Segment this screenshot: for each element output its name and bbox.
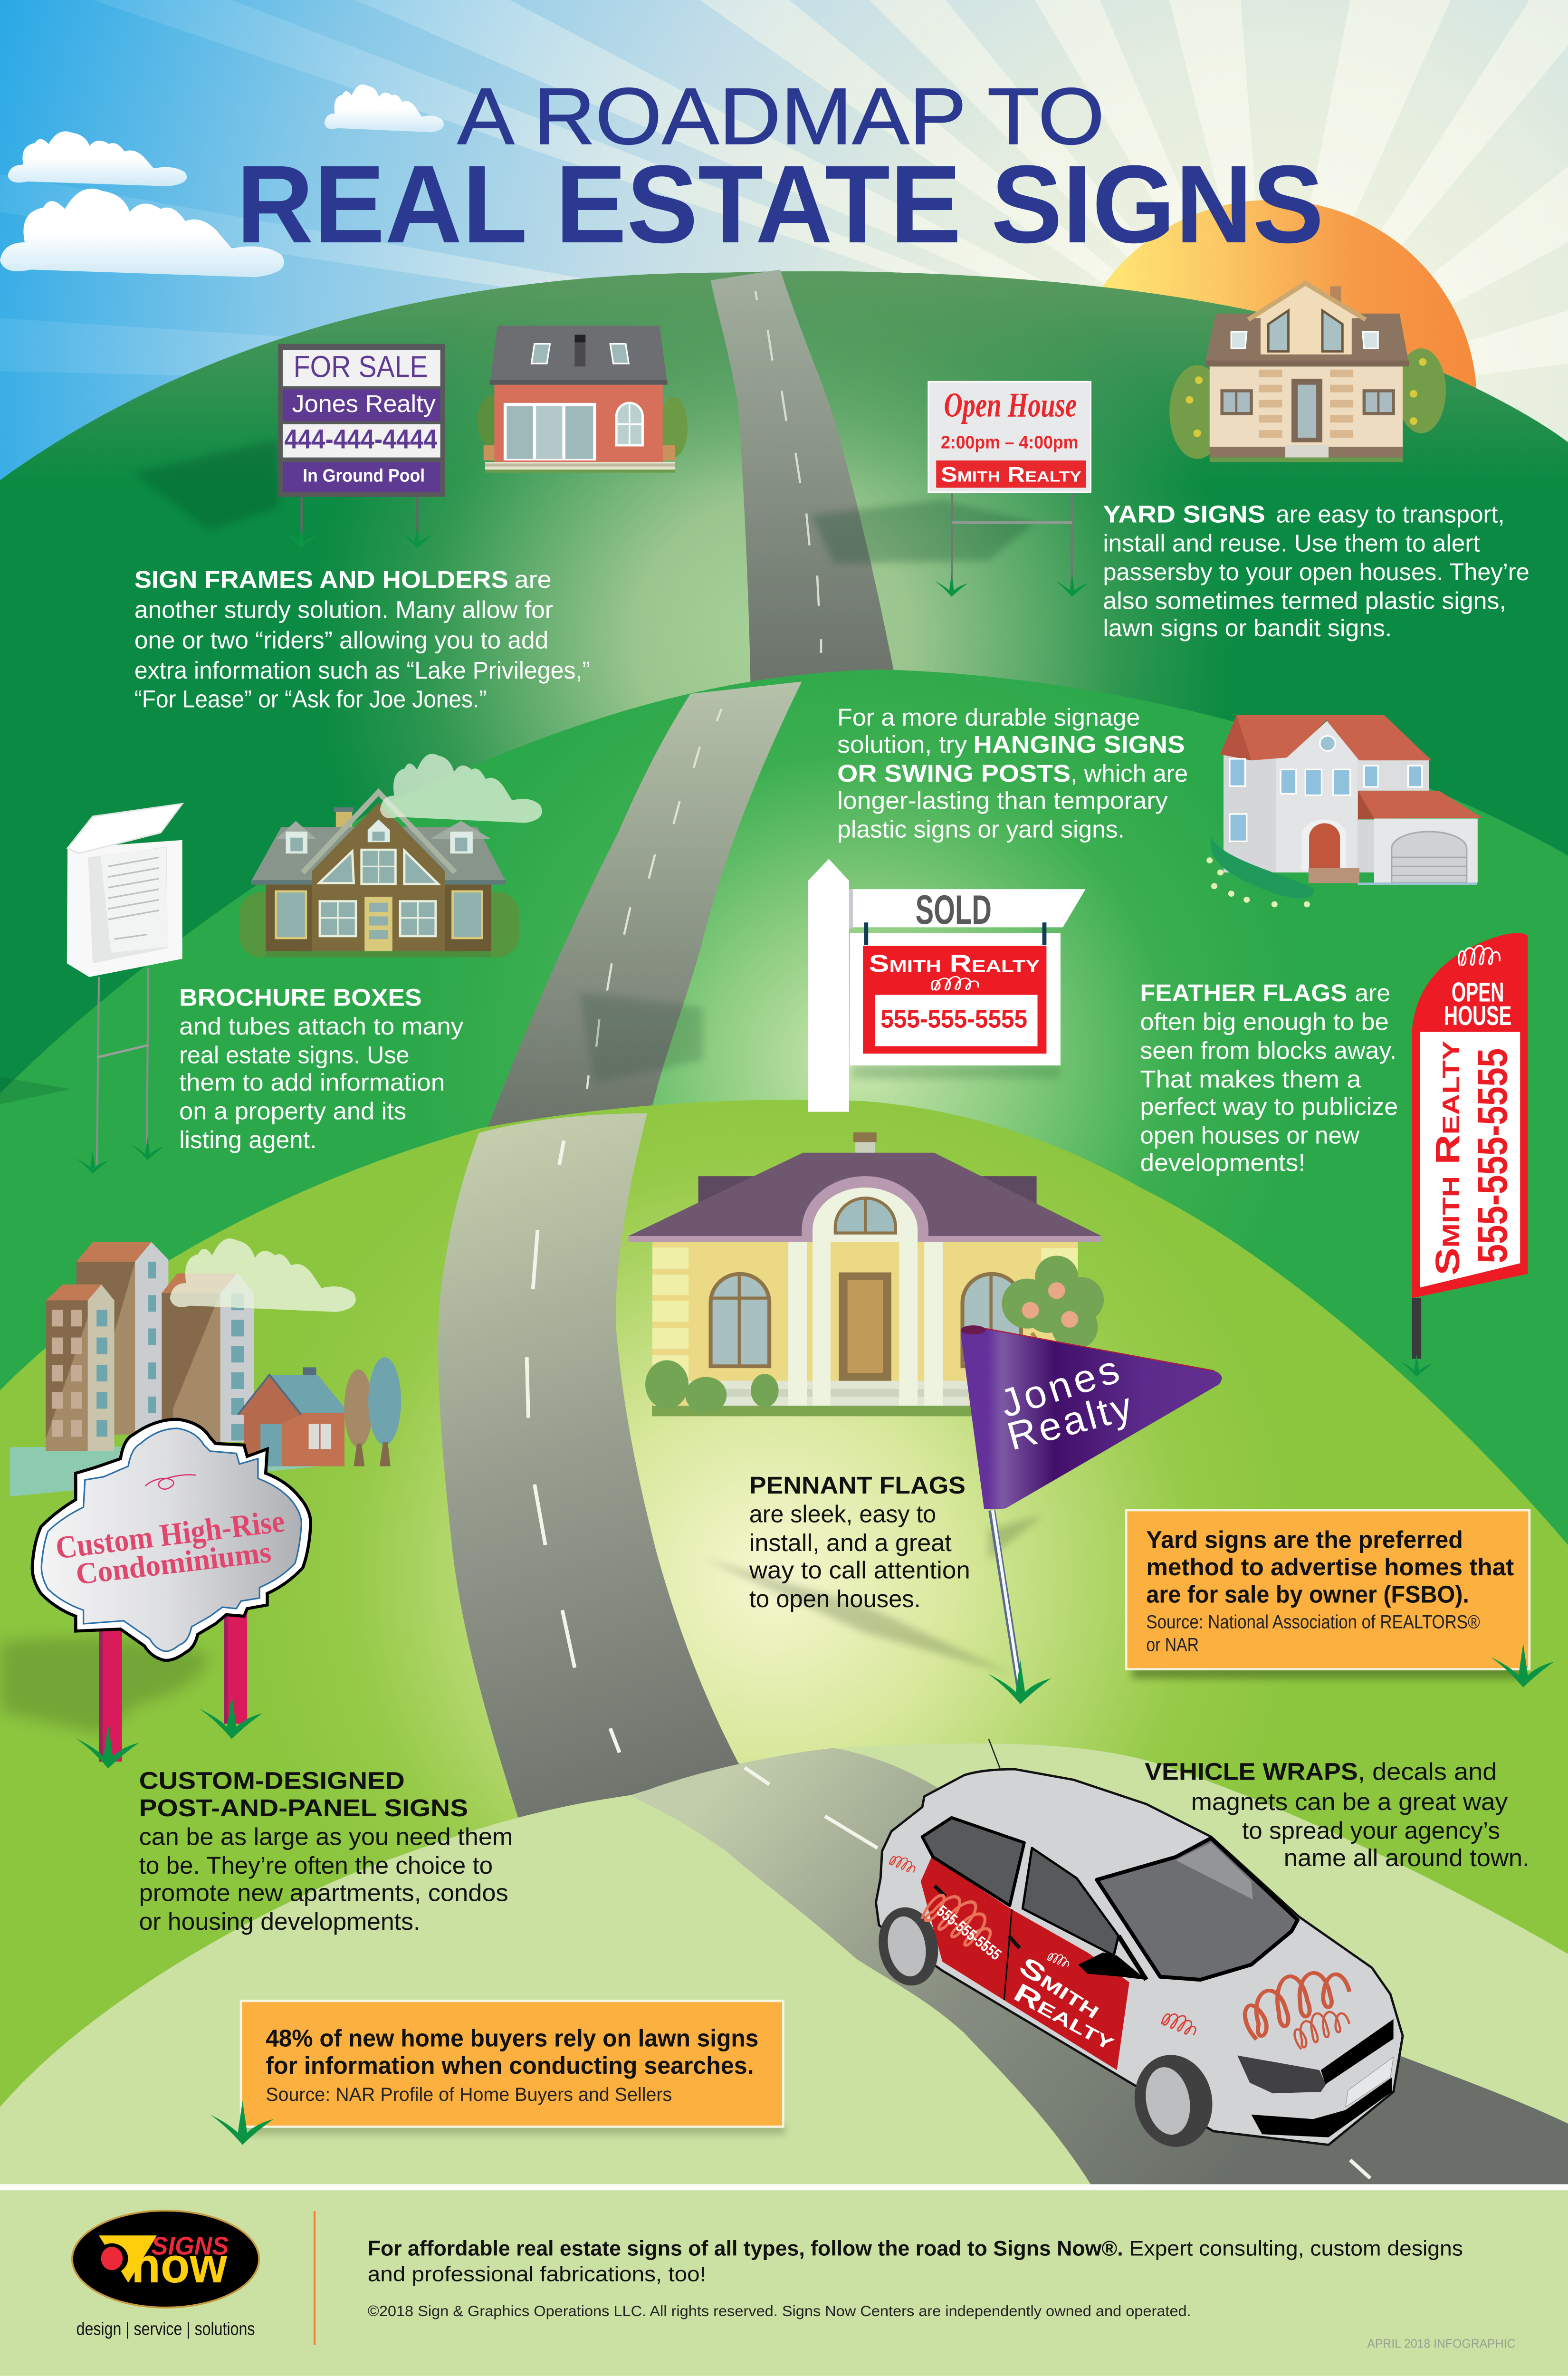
callout: yard signs FSBO: Source: National Association of REALTORS® xyxy=(1146,1611,1480,1633)
feather flag: 555-555-5555 xyxy=(1470,1048,1516,1263)
cloud over condos xyxy=(170,1238,356,1312)
text: yard signs: YARD SIGNS xyxy=(1103,500,1265,528)
text: hanging signs or swing posts: , which are xyxy=(1071,759,1188,787)
yard sign: open house: Open House xyxy=(944,386,1077,424)
text: sign frames and holders: one or two “riders” allowing you to add xyxy=(134,626,548,653)
text: vehicle wraps: name all around town. xyxy=(1284,1844,1530,1871)
text: hanging signs or swing posts: For a more durable signage xyxy=(837,703,1140,731)
callout: yard signs FSBO: method to advertise homes that xyxy=(1146,1553,1514,1581)
callout: yard signs FSBO: or NAR xyxy=(1146,1634,1199,1655)
pennant flag: Realty xyxy=(1003,1384,1137,1458)
road section 4 xyxy=(632,1748,1568,2184)
text: vehicle wraps: VEHICLE WRAPS xyxy=(1145,1758,1358,1785)
text: yard signs: passersby to your open houses. They’re xyxy=(1103,558,1530,585)
car with vehicle wrap: Smith xyxy=(1014,1951,1107,2024)
text: feather flags xyxy=(1140,979,1398,1176)
house: beige with brown roof xyxy=(1169,283,1446,462)
swing post: sold sign: 555-555-5555 xyxy=(880,1004,1027,1033)
house: white with red roof xyxy=(1206,715,1482,907)
text: pennant flags: install, and a great xyxy=(749,1529,952,1556)
text: pennant flags: are sleek, easy to xyxy=(749,1500,936,1527)
shadow of sold sign xyxy=(579,992,703,1083)
text: pennant flags: to open houses. xyxy=(749,1585,921,1612)
swing post: sold sign: SOLD xyxy=(916,887,992,933)
text: yard signs: are easy to transport, xyxy=(1276,500,1505,528)
foreground hill xyxy=(0,1744,1568,2184)
yard sign: open house xyxy=(928,382,1090,597)
callout: 48% of new home buyers xyxy=(210,2001,785,2145)
post-and-panel sign: custom high-rise condominiums xyxy=(0,1419,311,1768)
text: vehicle wraps: to spread your agency’s xyxy=(1242,1817,1500,1844)
footer: APRIL 2018 INFOGRAPHIC xyxy=(1367,2338,1515,2351)
logo: signs now: SIGNS xyxy=(152,2231,229,2260)
text: sign frames and holders: SIGN FRAMES AND HOLDERS xyxy=(134,565,508,593)
text: brochure boxes: and tubes attach to many xyxy=(179,1013,464,1040)
sign frame: for sale: In Ground Pool xyxy=(303,466,425,486)
car with vehicle wrap: 555-555-5555 xyxy=(933,1902,1004,1964)
text: vehicle wraps: magnets can be a great way xyxy=(1191,1788,1508,1815)
callout: yard signs FSBO xyxy=(1126,1510,1554,1687)
callout: yard signs FSBO: Yard signs are the preferred xyxy=(1146,1526,1463,1553)
text: brochure boxes: real estate signs. Use xyxy=(179,1041,410,1069)
footer: ©2018 Sign & Graphics Operations LLC. All rights reserved. Signs Now Centers are independently owned and operated. xyxy=(368,2302,1191,2319)
brochure box shadow xyxy=(0,1077,71,1104)
text: hanging signs or swing posts: longer-lasting than temporary xyxy=(837,787,1168,814)
callout: 48% of new home buyers: 48% of new home buyers rely on lawn signs xyxy=(266,2024,758,2051)
cloud behind brown house xyxy=(380,754,542,823)
text: custom-designed post-and-panel signs: POST-AND-PANEL SIGNS xyxy=(139,1794,468,1821)
text: hanging signs or swing posts xyxy=(837,703,1188,843)
condo towers and small house xyxy=(10,1242,401,1496)
text: feather flags: FEATHER FLAGS xyxy=(1140,979,1347,1006)
pennant flag xyxy=(961,1325,1222,1704)
feather flag: HOUSE xyxy=(1444,1001,1511,1031)
text: yard signs: install and reuse. Use them to alert xyxy=(1103,529,1480,556)
footer: and professional fabrications, too! xyxy=(368,2262,706,2286)
text: custom-designed post-and-panel signs xyxy=(139,1767,513,1935)
middle hill xyxy=(0,670,1568,1666)
text: brochure boxes xyxy=(179,984,464,1153)
text: custom-designed post-and-panel signs: or housing developments. xyxy=(139,1907,420,1935)
callout: 48% of new home buyers: for information when conducting searches. xyxy=(266,2051,754,2079)
house: brown gabled xyxy=(239,792,519,958)
sign frame: for sale: Jones Realty xyxy=(292,390,436,417)
text: brochure boxes: them to add information xyxy=(179,1069,445,1096)
footer: Expert consulting, custom designs xyxy=(1129,2236,1463,2260)
text: feather flags: often big enough to be xyxy=(1140,1008,1389,1035)
text: vehicle wraps xyxy=(1145,1758,1530,1871)
road section 2 xyxy=(479,681,802,1151)
text: hanging signs or swing posts: plastic signs or yard signs. xyxy=(837,815,1125,843)
text: yard signs: also sometimes termed plastic signs, xyxy=(1103,587,1506,614)
text: hanging signs or swing posts: solution, try xyxy=(837,731,967,758)
feather flag xyxy=(1400,933,1528,1377)
swing post: sold sign xyxy=(808,859,1086,1112)
logo: signs now: now xyxy=(131,2237,227,2293)
logo: signs now xyxy=(72,2211,259,2339)
yard sign: open house: 2:00pm – 4:00pm xyxy=(941,432,1078,452)
house: yellow with purple roof xyxy=(629,1132,1104,1416)
callout: yard signs FSBO: are for sale by owner (FSBO). xyxy=(1146,1581,1469,1608)
pennant shadow xyxy=(705,1515,1043,1674)
text: sign frames and holders xyxy=(134,565,590,712)
sign shadows on far hill xyxy=(134,439,1035,564)
text: feather flags: That makes them a xyxy=(1140,1065,1361,1093)
post-and-panel sign: custom high-rise condominiums: Custom High-Rise xyxy=(54,1503,287,1566)
text: sign frames and holders: another sturdy solution. Many allow for xyxy=(134,596,553,623)
text: feather flags: open houses or new xyxy=(1140,1121,1360,1149)
text: sign frames and holders: extra information such as “Lake Privileges,” xyxy=(134,656,590,684)
sun xyxy=(1066,200,1477,603)
pennant flag: Jones xyxy=(994,1347,1124,1426)
post-and-panel sign: custom high-rise condominiums: Condominiums xyxy=(74,1535,273,1591)
title: REAL ESTATE SIGNS xyxy=(236,142,1324,266)
footer: For affordable real estate signs of all types, follow the road to Signs Now®. xyxy=(368,2236,1123,2260)
text: feather flags: perfect way to publicize xyxy=(1140,1093,1398,1120)
text: pennant flags xyxy=(749,1471,970,1612)
feather flag: OPEN xyxy=(1452,977,1504,1007)
text: pennant flags: PENNANT FLAGS xyxy=(749,1471,966,1499)
logo: signs now: design | service | solutions xyxy=(76,2319,255,2339)
yard sign: open house: Smith Realty xyxy=(941,462,1081,487)
text: custom-designed post-and-panel signs: promote new apartments, condos xyxy=(139,1879,508,1906)
car with vehicle wrap: Realty xyxy=(1009,1977,1121,2056)
text: brochure boxes: listing agent. xyxy=(179,1126,317,1153)
swing post: sold sign: Smith Realty xyxy=(869,950,1040,977)
sign frame: for sale xyxy=(278,344,445,548)
title: A ROADMAP TO xyxy=(457,72,1105,161)
text: vehicle wraps: , decals and xyxy=(1358,1758,1497,1785)
text: sign frames and holders: are xyxy=(515,565,552,593)
road section 1 xyxy=(711,269,896,697)
text: custom-designed post-and-panel signs: to be. They’re often the choice to xyxy=(139,1851,493,1879)
far hill xyxy=(0,271,1568,1181)
text: pennant flags: way to call attention xyxy=(749,1556,970,1583)
feather flag: Smith Realty xyxy=(1429,1041,1467,1275)
footer xyxy=(0,2184,1568,2376)
road section 3 xyxy=(438,1113,803,1840)
callout: 48% of new home buyers: Source: NAR Profile of Home Buyers and Sellers xyxy=(266,2084,672,2105)
clouds top left xyxy=(0,85,444,277)
text: feather flags: seen from blocks away. xyxy=(1140,1037,1396,1064)
text: feather flags: are xyxy=(1355,979,1390,1006)
text: brochure boxes: on a property and its xyxy=(179,1097,406,1124)
text: sign frames and holders: “For Lease” or “Ask for Joe Jones.” xyxy=(134,685,487,712)
text: feather flags: developments! xyxy=(1140,1149,1305,1176)
text: custom-designed post-and-panel signs: CUSTOM-DESIGNED xyxy=(139,1767,405,1794)
text: yard signs: lawn signs or bandit signs. xyxy=(1103,614,1392,642)
text: brochure boxes: BROCHURE BOXES xyxy=(179,984,422,1011)
title xyxy=(236,72,1324,266)
text: hanging signs or swing posts: HANGING SIGNS xyxy=(973,731,1185,758)
text: yard signs xyxy=(1103,500,1530,642)
brochure box xyxy=(67,804,182,1174)
sign frame: for sale: 444-444-4444 xyxy=(284,424,437,454)
near hill xyxy=(0,1100,1568,2184)
text: custom-designed post-and-panel signs: can be as large as you need them xyxy=(139,1823,513,1850)
text: hanging signs or swing posts: OR SWING POSTS xyxy=(837,759,1071,787)
car with vehicle wrap xyxy=(872,1739,1403,2153)
house: red brick with grey roof xyxy=(478,326,688,473)
sign frame: for sale: FOR SALE xyxy=(294,350,428,384)
